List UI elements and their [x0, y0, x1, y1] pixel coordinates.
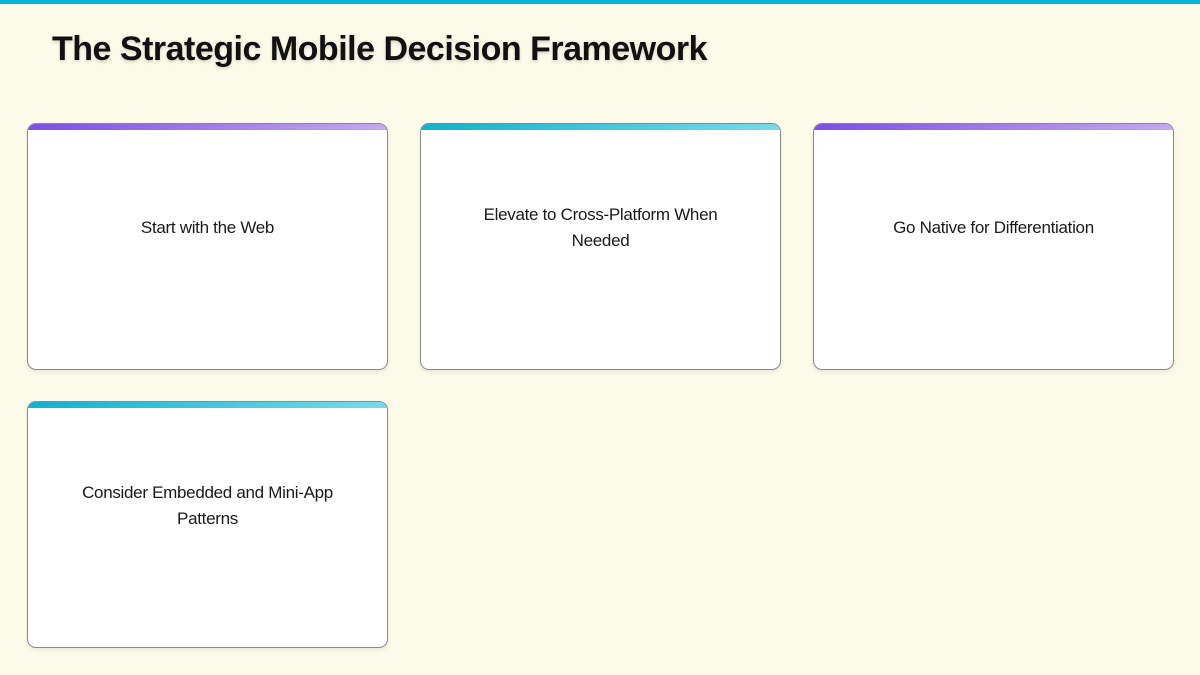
card text: Start with the Web — [141, 218, 274, 237]
card text: Consider Embedded and Mini-App Patterns — [82, 483, 333, 528]
card text: Elevate to Cross-Platform When Needed — [484, 205, 717, 250]
card text: Go Native for Differentiation — [893, 218, 1094, 237]
card: cross-platform — [420, 123, 781, 370]
card: embedded mini-app — [27, 401, 388, 648]
title: The Strategic Mobile Decision Framework — [52, 30, 707, 68]
card: go native — [813, 123, 1174, 370]
card: start with the web — [27, 123, 388, 370]
